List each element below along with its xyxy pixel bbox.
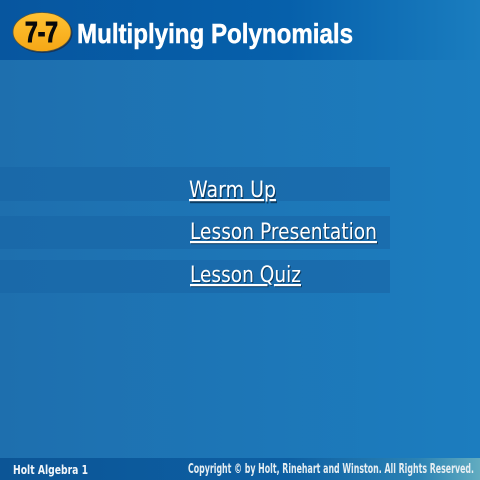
menu item: warm up — [0, 167, 390, 205]
footer label: Holt Algebra 1 — [13, 463, 88, 477]
section badge — [13, 12, 72, 53]
menu item: lesson presentation — [0, 216, 390, 249]
header band — [0, 0, 480, 60]
title: Multiplying Polynomials — [77, 18, 353, 49]
menu item: warm up: Warm Up — [190, 180, 277, 205]
menu item: lesson quiz: Lesson Quiz — [190, 263, 301, 288]
menu item: lesson presentation: Lesson Presentation — [190, 220, 377, 245]
footer band — [0, 458, 480, 480]
menu item: lesson presentation: Lesson Presentation — [191, 221, 378, 246]
menu item: lesson quiz — [0, 260, 390, 293]
section badge: 7-7 — [25, 17, 58, 49]
menu item: lesson quiz: Lesson Quiz — [191, 264, 302, 289]
menu item: warm up: Warm Up — [189, 178, 276, 203]
